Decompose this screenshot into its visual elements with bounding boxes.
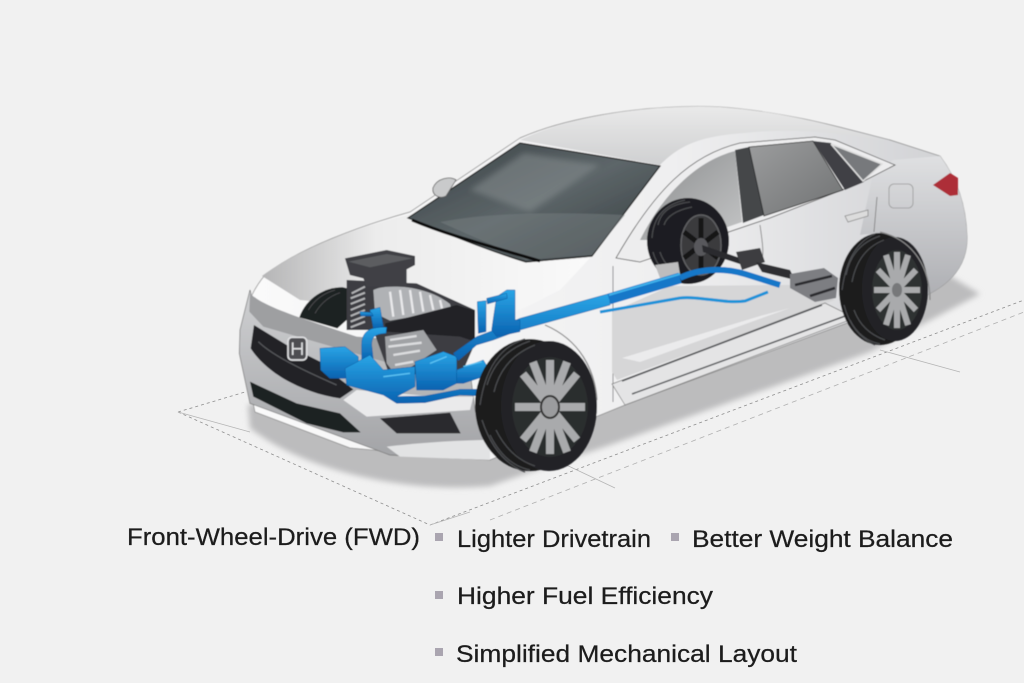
hood panel bbox=[262, 214, 590, 320]
benefit: weight balance: Better Weight Balance bbox=[692, 526, 953, 553]
rear loop tube bbox=[680, 270, 780, 285]
fuel door bbox=[889, 184, 913, 208]
rear left tire bbox=[647, 198, 729, 284]
blue tube front bbox=[320, 290, 610, 403]
bullet: mechanical layout bbox=[435, 648, 443, 656]
front bumper bbox=[239, 290, 490, 460]
caption title: Front-Wheel-Drive (FWD) bbox=[127, 524, 420, 551]
door seam bbox=[613, 197, 877, 402]
rear quarter window bbox=[831, 144, 882, 181]
thin brake tube bbox=[600, 292, 768, 312]
floor highlight bbox=[622, 308, 790, 362]
rear left hub bbox=[694, 238, 708, 256]
door handle bbox=[845, 210, 868, 222]
rear right hub bbox=[892, 283, 902, 297]
intake manifold bbox=[373, 286, 452, 321]
rear left wheel bbox=[647, 198, 729, 284]
b-pillar bbox=[735, 147, 764, 223]
fog lamp bay bbox=[380, 413, 461, 433]
valve cover band bbox=[385, 305, 475, 342]
windshield bbox=[408, 143, 660, 262]
benefit: mechanical layout: Simplified Mechanical Layout bbox=[456, 641, 797, 668]
hood lip bbox=[249, 293, 403, 363]
engine bay bbox=[347, 280, 475, 377]
side mirror bbox=[433, 178, 456, 197]
sill grooves bbox=[622, 305, 848, 394]
door sill bbox=[612, 303, 855, 405]
lower grille bbox=[250, 382, 361, 432]
rear wheel arch bbox=[880, 232, 930, 300]
rear right rim bbox=[872, 250, 922, 330]
bumper highlight bbox=[387, 440, 490, 460]
front door window bbox=[640, 151, 742, 240]
main tube highlight bbox=[609, 274, 680, 295]
front right tire bbox=[475, 339, 585, 471]
upper grille bbox=[251, 325, 353, 398]
bullet: lighter drivetrain bbox=[435, 533, 443, 541]
tail light bbox=[933, 173, 958, 196]
interior dashboard hint bbox=[440, 213, 625, 260]
wheel arch highlight bbox=[545, 325, 597, 400]
rear left rim bbox=[681, 215, 721, 275]
coil spring bbox=[351, 287, 365, 327]
front fascia group, drawn at 3x bbox=[239, 250, 610, 460]
rear axle and driveshaft bbox=[655, 245, 838, 302]
front right sidewall bbox=[501, 341, 597, 471]
rear right wheel bbox=[839, 233, 928, 345]
lower engine casting bbox=[385, 330, 437, 377]
car illustration bbox=[239, 107, 967, 472]
rear blue lines bbox=[600, 270, 780, 312]
ground shadow bbox=[248, 270, 980, 487]
rear right sidewall bbox=[862, 237, 928, 341]
bullet: weight balance bbox=[671, 533, 679, 541]
roof panel bbox=[520, 107, 885, 165]
car body shell bbox=[240, 107, 967, 460]
engine top cover bbox=[345, 250, 415, 287]
main tube extension bbox=[609, 278, 680, 299]
front left tire bbox=[299, 287, 354, 328]
benefit: fuel efficiency: Higher Fuel Efficiency bbox=[457, 583, 713, 610]
benefit: lighter drivetrain: Lighter Drivetrain bbox=[457, 526, 651, 553]
rear door window bbox=[749, 141, 843, 216]
brand badge bbox=[288, 337, 307, 360]
c-pillar bbox=[813, 141, 864, 190]
windshield reflection bbox=[470, 153, 600, 212]
ground reference lines bbox=[178, 300, 1024, 525]
chassis floor cutaway bbox=[612, 285, 835, 380]
bullet: fuel efficiency bbox=[435, 591, 443, 599]
front right hub bbox=[541, 396, 559, 418]
wiper bbox=[412, 220, 540, 261]
rear right tire bbox=[839, 233, 921, 345]
front right wheel bbox=[475, 339, 597, 472]
rear quarter panel bbox=[860, 156, 967, 296]
front right rim bbox=[512, 357, 588, 457]
window surround bbox=[616, 137, 895, 262]
benefits list bbox=[435, 526, 953, 668]
